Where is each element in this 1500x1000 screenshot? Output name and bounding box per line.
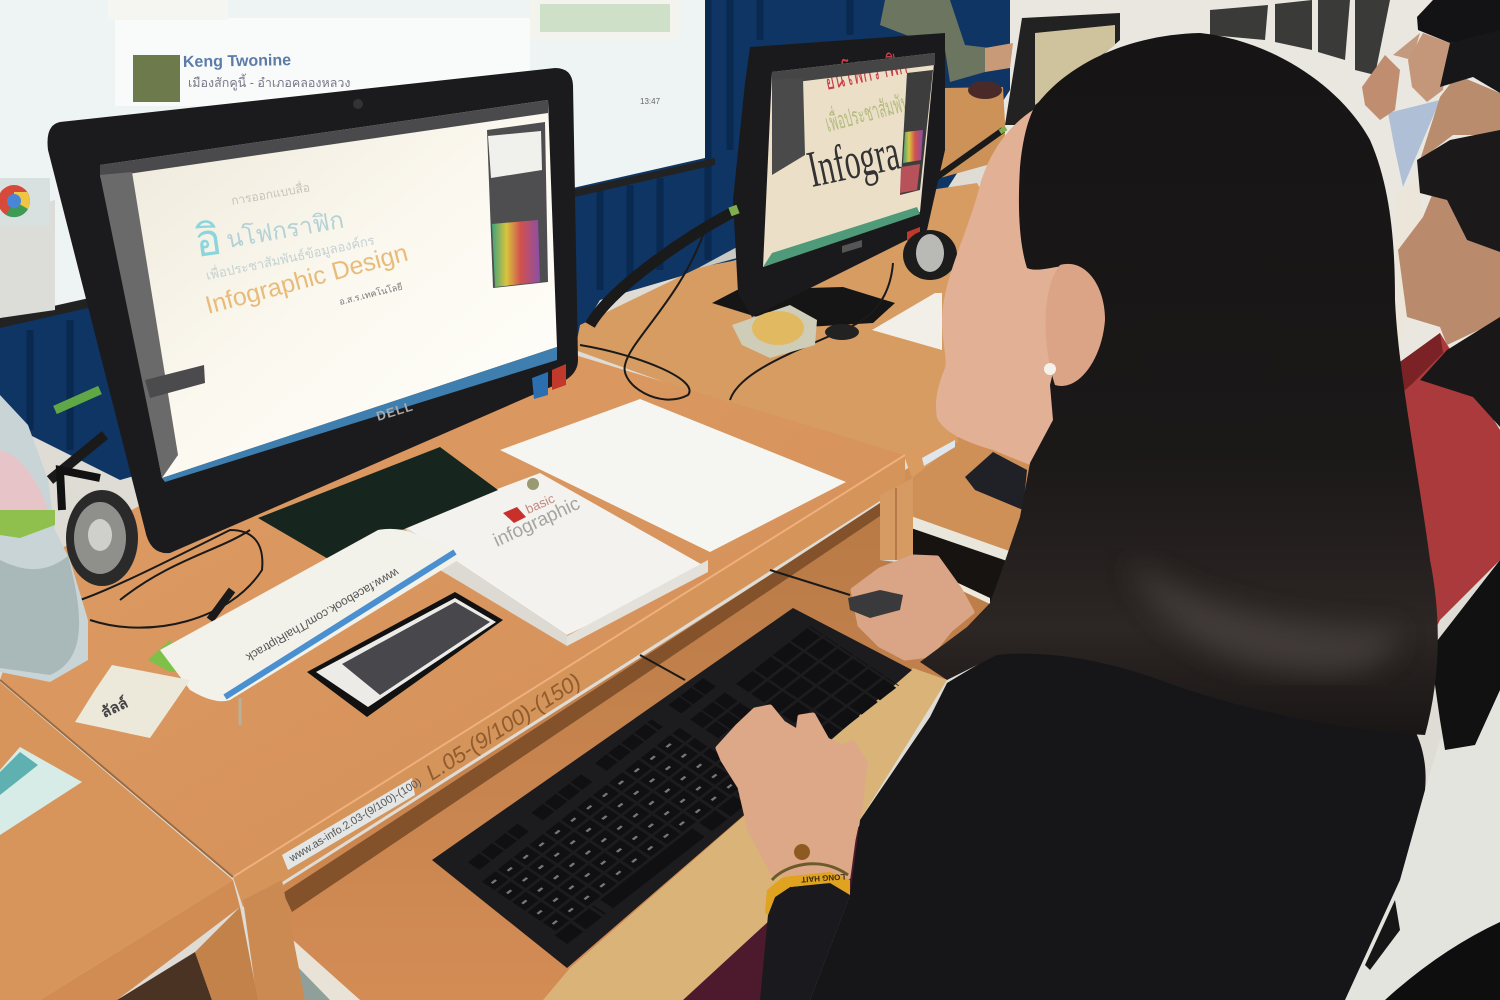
chair wheel <box>1385 922 1500 1000</box>
main computer monitor: อ.ส.ร.เทคโนโลยี <box>338 282 403 307</box>
main computer monitor: เพื่อประชาสัมพันธ์ข้อมูลองค์กร <box>204 232 376 284</box>
student mouse hand <box>853 557 972 658</box>
pencil case: www.facebook.com/ThaiRiptrack <box>243 565 402 665</box>
armrest strip <box>543 668 947 1000</box>
computer mouse: second desk <box>825 324 859 340</box>
office chair <box>1365 560 1500 970</box>
pastry on second desk <box>732 305 817 358</box>
book: white notebook <box>500 399 846 552</box>
student typing hand <box>718 707 865 877</box>
keyboard <box>432 608 912 968</box>
desk labels <box>282 668 585 870</box>
second computer monitor: อินโฟกราฟิก <box>821 45 910 97</box>
desk leg by back desk <box>880 478 913 560</box>
headphones <box>60 470 138 586</box>
icon: chrome logo <box>0 178 50 226</box>
person in plaid shirt <box>880 0 1013 82</box>
dark gap under back desk <box>905 527 1010 604</box>
blue curtain <box>0 0 1010 480</box>
hair highlight <box>1130 560 1400 674</box>
desk labels: L.05-(9/100)-(150) <box>421 668 585 785</box>
neighbour: man holding glasses <box>1362 0 1500 187</box>
keyboard tray <box>283 503 990 1000</box>
projected post card: Keng Twonine <box>183 52 291 71</box>
main desk top and front panel <box>0 355 905 907</box>
second computer monitor <box>712 33 945 328</box>
projected clock: 13:47 <box>640 97 661 106</box>
student face <box>936 110 1110 465</box>
book: basic infographic <box>402 473 708 646</box>
main computer monitor: DELL <box>374 398 415 424</box>
pencil case <box>148 529 458 725</box>
main desk leg <box>243 880 305 1000</box>
projected post card <box>115 18 530 106</box>
back desk keyboard <box>965 452 1027 510</box>
floor tiles <box>1345 690 1500 1000</box>
book: basic infographic: infographic <box>490 493 583 552</box>
neighbours on the right <box>1362 0 1500 650</box>
projected post card: เมืองสักคูนี้ - อำเภอคลองหลวง <box>188 73 351 91</box>
book: basic infographic: basic <box>523 490 557 517</box>
main computer monitor: Infographic Design <box>202 239 411 320</box>
distant monitors <box>1210 0 1390 75</box>
student sweater <box>810 650 1426 1000</box>
headphones: second desk <box>903 230 957 280</box>
sweater sleeve <box>760 883 850 1000</box>
student ear <box>1045 264 1105 386</box>
neighbour: man behind <box>1420 30 1500 160</box>
main computer monitor: นโฟกราฟิก <box>224 206 346 254</box>
main computer monitor: อิ <box>192 215 225 267</box>
neighbour: woman in red <box>1378 130 1500 650</box>
snack wrapper <box>75 665 190 738</box>
main computer monitor <box>48 68 578 560</box>
bracelet <box>765 844 850 915</box>
third computer monitor <box>1005 13 1120 125</box>
cables <box>50 128 1006 680</box>
student long black hair <box>920 33 1438 735</box>
bracelet: LONG HAIT <box>801 872 845 884</box>
second computer monitor: เพื่อประชาสัมพันธ์ <box>821 83 920 138</box>
back desks <box>575 81 1045 562</box>
smartphone <box>307 592 503 717</box>
lower left desk <box>0 680 258 1000</box>
snack wrapper: ลัลล์ <box>98 694 131 722</box>
water bottle <box>0 395 88 682</box>
snack wrapper: lower left <box>0 747 82 835</box>
earring <box>1044 363 1056 375</box>
desk labels: www.as-info.2.03-(9/100)-(100) <box>287 776 424 865</box>
second computer monitor: Infogra <box>803 124 904 199</box>
colourful skirt <box>683 825 873 1000</box>
computer mouse <box>848 590 903 618</box>
projector screen <box>0 0 715 328</box>
main computer monitor: การออกแบบสื่อ <box>230 178 311 208</box>
book: second desk <box>872 293 942 350</box>
